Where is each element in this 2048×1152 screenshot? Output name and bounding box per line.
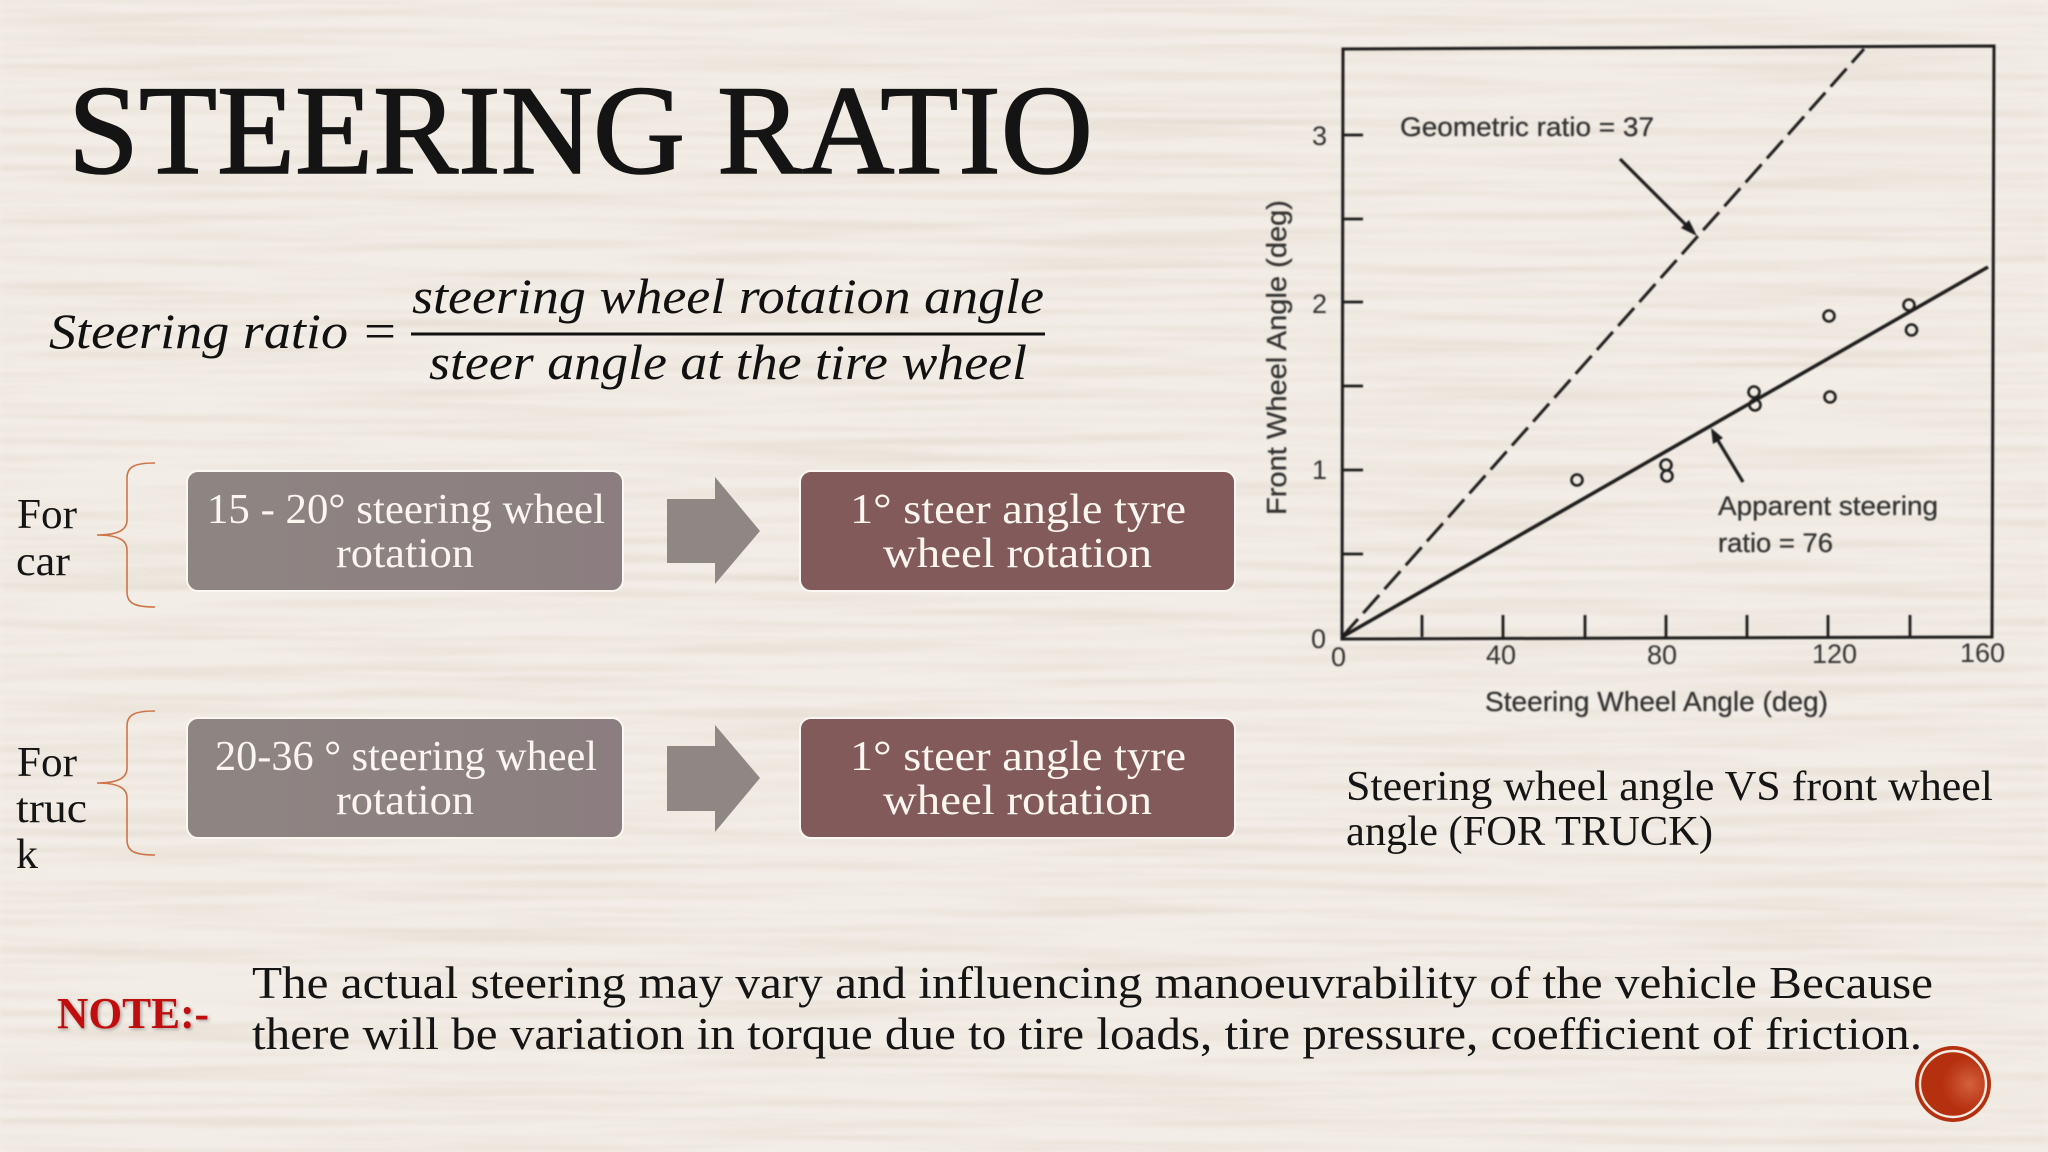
arrow: apparent ratio pointer: [1711, 428, 1743, 482]
y axis numbers: [1311, 121, 1327, 654]
label: for truck: For: [17, 740, 77, 786]
note text: The actual steering may vary and influencing manoeuvrability of the vehicle Because: [252, 958, 1933, 1008]
y axis numbers: 3: [1312, 121, 1327, 151]
chart annotations: Apparent steering: [1718, 491, 1938, 521]
formula: steering ratio: [49, 268, 1045, 390]
y axis numbers: 0: [1311, 624, 1326, 654]
label: for truck: k: [16, 832, 38, 878]
box: car steer angle: [800, 471, 1235, 591]
axis ticks: [1342, 135, 1910, 637]
chart annotations: ratio = 76: [1718, 528, 1833, 558]
box: truck steering wheel rotation: 20-36 ° steering wheel: [215, 734, 597, 780]
chart: steering wheel angle vs front wheel angle: [1261, 46, 2005, 717]
data points: [1572, 300, 1917, 486]
chart annotations: [1400, 112, 1938, 558]
x axis numbers: 80: [1647, 640, 1677, 670]
formula left side: Steering ratio: [49, 303, 348, 359]
box: truck steering wheel rotation: [187, 718, 623, 838]
box: car steering wheel rotation: 15 - 20° steering wheel: [207, 487, 605, 533]
arrow: geometric ratio pointer: [1620, 159, 1697, 236]
label: for truck: truc: [16, 786, 87, 832]
chart caption: angle (FOR TRUCK): [1346, 809, 1713, 855]
decorative badge: red circle: [1915, 1046, 1991, 1122]
plot frame: [1342, 46, 1994, 639]
title: STEERING RATIO: [68, 61, 1093, 201]
label: for car: For: [17, 492, 77, 538]
chart caption: Steering wheel angle VS front wheel: [1346, 764, 1993, 810]
brace: truck: [97, 711, 155, 855]
box: truck steering wheel rotation: rotation: [336, 778, 474, 824]
note label: NOTE:-: [57, 989, 209, 1038]
box: truck steer angle: [800, 718, 1235, 838]
geometric ratio dashed line: [1342, 49, 1864, 637]
box: car steer angle: 1° steer angle tyre: [850, 487, 1186, 533]
arrow: car: [667, 477, 760, 584]
y axis numbers: 1: [1312, 455, 1327, 485]
row: for car: [16, 463, 1235, 607]
x axis numbers: 40: [1486, 640, 1516, 670]
equals sign: =: [364, 303, 396, 359]
row: for truck: [16, 711, 1235, 878]
note text: there will be variation in torque due to tire loads, tire pressure, coefficient of friction.: [252, 1009, 1922, 1059]
x axis numbers: 160: [1960, 638, 2005, 668]
box: car steer angle: wheel rotation: [883, 531, 1152, 577]
chart caption: [1346, 764, 1993, 855]
y axis numbers: 2: [1312, 289, 1327, 319]
arrow: truck: [667, 725, 760, 832]
chart annotations: Geometric ratio = 37: [1400, 112, 1654, 142]
box: truck steer angle: 1° steer angle tyre: [850, 734, 1186, 780]
x axis numbers: 120: [1812, 639, 1857, 669]
label: for truck: [16, 740, 87, 878]
label: for car: car: [16, 539, 70, 585]
apparent ratio solid line: [1342, 267, 1988, 637]
brace: car: [97, 463, 155, 607]
numerator: steering wheel rotation angle: [412, 268, 1044, 324]
x axis numbers: [1331, 638, 2005, 672]
box: truck steer angle: wheel rotation: [883, 778, 1152, 824]
label: for car: [16, 492, 77, 585]
x axis title: Steering Wheel Angle (deg): [1485, 686, 1828, 717]
note text: [252, 958, 1933, 1059]
fraction bar: [411, 332, 1045, 336]
y axis title: Front Wheel Angle (deg): [1261, 200, 1292, 515]
denominator: steer angle at the tire wheel: [429, 334, 1027, 390]
x axis numbers: 0: [1331, 642, 1346, 672]
box: car steering wheel rotation: [187, 471, 623, 591]
box: car steering wheel rotation: rotation: [336, 531, 474, 577]
